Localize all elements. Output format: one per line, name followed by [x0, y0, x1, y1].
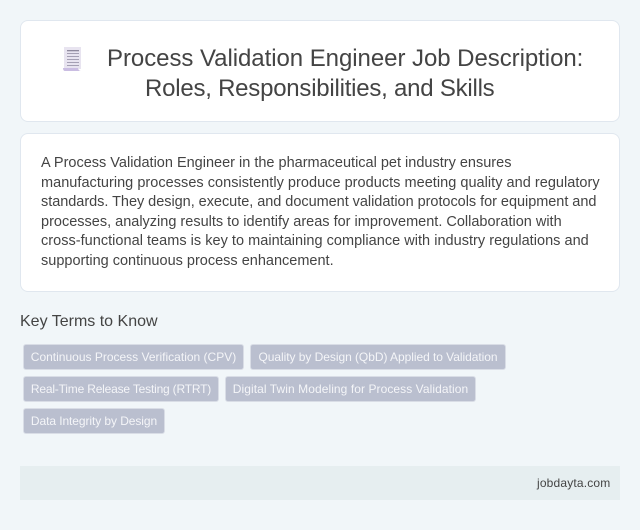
- text block: description: standards. They design, execute, and document validation protocols for equipment and: [41, 194, 596, 210]
- text block: description: manufacturing processes consistently produce products meeting quality and regulatory: [41, 174, 600, 190]
- tag: CPV: Continuous Process Verification (CPV): [31, 350, 236, 364]
- text block: description: cross-functional teams is key to maintaining compliance with industry regulations and: [41, 233, 589, 249]
- icon: document scroll: [63, 47, 81, 71]
- footer bar: [20, 466, 620, 500]
- tag: data integrity: Data Integrity by Design: [31, 414, 157, 428]
- tags: key terms: [23, 344, 506, 434]
- tag: data integrity: [23, 408, 165, 434]
- text block: description: processes, analyzing results to identify areas for improvement. Collaboration with: [41, 214, 562, 230]
- tag: QbD: [250, 344, 506, 370]
- heading: key terms: Key Terms to Know: [20, 313, 158, 330]
- tag: CPV: [23, 344, 244, 370]
- tag: RTRT: Real-Time Release Testing (RTRT): [31, 382, 211, 396]
- title: Process Validation Engineer Job Description:: [107, 45, 583, 72]
- tag: QbD: Quality by Design (QbD) Applied to Validation: [258, 350, 498, 364]
- title: Roles, Responsibilities, and Skills: [145, 75, 494, 102]
- tag: digital twin: Digital Twin Modeling for Process Validation: [233, 382, 468, 396]
- title: [107, 45, 583, 102]
- text block: description: supporting continuous process enhancement.: [41, 252, 334, 268]
- panel: description: [20, 133, 620, 292]
- panel: title card: [20, 20, 620, 122]
- tag: RTRT: [23, 376, 219, 402]
- footer text: jobdayta.com: [537, 476, 610, 490]
- text block: description: [41, 155, 600, 268]
- tag: digital twin: [225, 376, 476, 402]
- text block: description: A Process Validation Engineer in the pharmaceutical pet industry ensures: [41, 155, 511, 171]
